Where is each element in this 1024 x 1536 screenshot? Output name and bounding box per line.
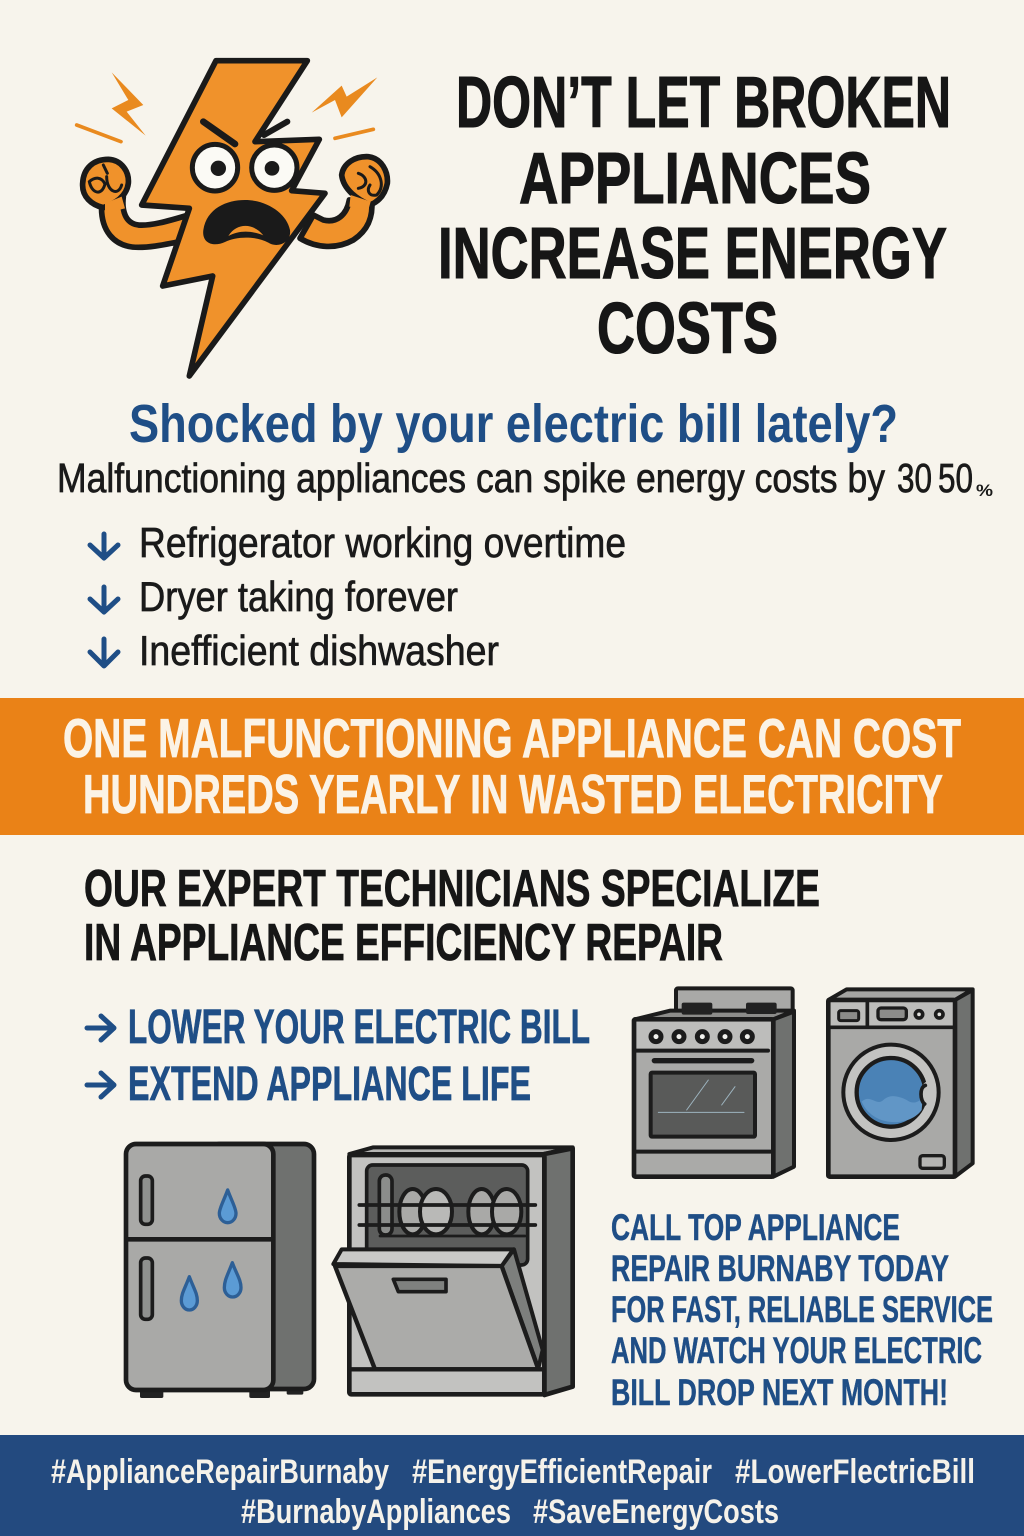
bullet list: warning signs (90, 519, 626, 674)
hashtags: #EnergyEfficientRepair (412, 1453, 712, 1491)
call to action text: CALL TOP APPLIANCE (611, 1207, 900, 1248)
icon: small sparks around mascot (77, 72, 377, 142)
text: refrigerator: Refrigerator working overtime (139, 519, 626, 566)
heading: expert technicians (84, 860, 820, 972)
call to action text (611, 1207, 993, 1413)
text block: malfunctioning appliances statistic: Malfunctioning appliances can spike energy costs by (57, 455, 885, 501)
benefits list (87, 1001, 590, 1111)
text: lower your electric bill: LOWER YOUR ELECTRIC BILL (128, 1001, 590, 1054)
heading: expert technicians: IN APPLIANCE EFFICIENCY REPAIR (84, 914, 723, 972)
hashtags: #BurnabyAppliances (241, 1493, 511, 1531)
icon: open dishwasher (333, 1147, 573, 1395)
icon: water drops (181, 1190, 241, 1310)
heading: shocked by your electric bill: Shocked by your electric bill lately? (129, 394, 898, 454)
text block: malfunctioning appliances statistic: 50 (938, 455, 973, 501)
hashtags: #SaveEnergyCosts (533, 1493, 779, 1531)
icon: mascot face (192, 122, 297, 245)
title: APPLIANCES (519, 139, 871, 219)
icon: down arrow 1 (90, 534, 118, 558)
text: extend appliance life: EXTEND APPLIANCE LIFE (128, 1058, 531, 1111)
icon: bolt body (142, 61, 325, 376)
icon: right arrow 1 (87, 1016, 114, 1040)
icon: refrigerator with water drops (126, 1144, 314, 1398)
icon: angry lightning bolt mascot (77, 61, 387, 376)
icon: stove and oven (634, 988, 794, 1177)
icon: mascot arms and fists (83, 157, 387, 247)
icon: right arrow 2 (87, 1073, 114, 1097)
title (438, 63, 951, 369)
icon: down arrow 2 (90, 587, 118, 612)
text: dryer: Dryer taking forever (139, 573, 458, 620)
hashtags: #LowerFlectricBill (735, 1453, 975, 1491)
hashtags: #ApplianceRepairBurnaby (51, 1453, 389, 1491)
icon: down arrow 3 (90, 639, 118, 666)
panel: hashtag footer (0, 1435, 1024, 1536)
hashtags (51, 1453, 975, 1531)
icon: washing machine (828, 989, 973, 1177)
panel: orange banner (0, 698, 1024, 835)
banner text (63, 707, 961, 825)
text block: malfunctioning appliances statistic: 30 (897, 455, 932, 501)
text block: malfunctioning appliances statistic: % (976, 481, 993, 500)
text: dishwasher: Inefficient dishwasher (139, 627, 499, 674)
title: COSTS (597, 289, 778, 369)
